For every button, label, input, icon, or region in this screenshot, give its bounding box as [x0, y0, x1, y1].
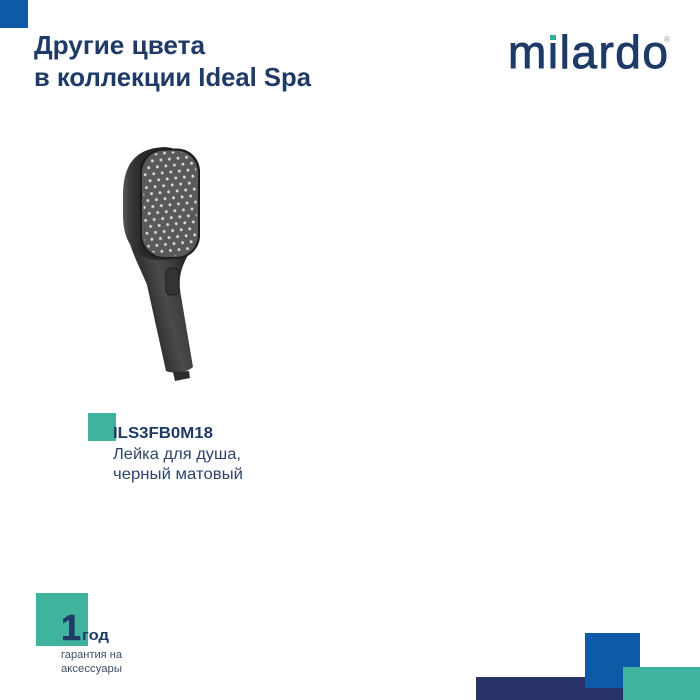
product description: Лейка для душа, [113, 446, 241, 463]
warranty description: аксессуары [61, 663, 122, 675]
button [166, 268, 179, 295]
product code: ILS3FB0M18 [113, 425, 213, 442]
product label [88, 413, 243, 483]
logo: milardo: ® [664, 35, 670, 44]
head rim [140, 148, 200, 258]
warranty description [61, 649, 123, 675]
teal square [36, 593, 88, 646]
corner blocks [476, 633, 700, 700]
warranty unit: год [82, 627, 110, 644]
connector nozzle [173, 371, 190, 381]
title: Другие цвета [34, 30, 206, 60]
icon: shower head [123, 147, 200, 381]
logo: milardo: milardo [508, 26, 668, 78]
teal marker [88, 413, 116, 441]
title [34, 30, 312, 92]
warranty number: 1 [61, 607, 81, 648]
corner square [0, 0, 28, 28]
nozzle dots [143, 151, 197, 256]
title: в коллекции Ideal Spa [34, 62, 312, 92]
warranty description: гарантия на [61, 649, 123, 661]
product description [113, 446, 243, 483]
warranty badge [36, 593, 123, 675]
product description: черный матовый [113, 466, 243, 483]
face plate [142, 150, 198, 257]
head back shell [123, 147, 172, 260]
handle [130, 244, 193, 373]
